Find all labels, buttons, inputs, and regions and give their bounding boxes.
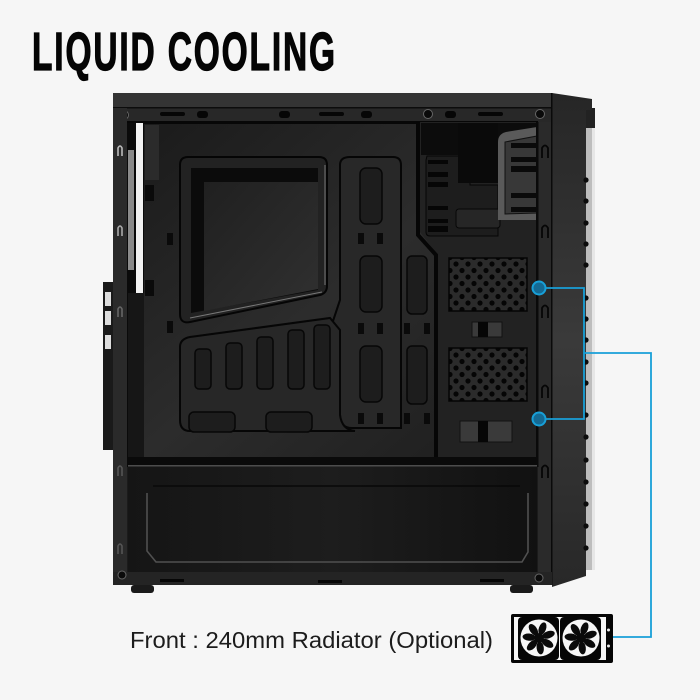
callout lines <box>546 288 651 637</box>
feet <box>131 585 533 593</box>
icon: radiator <box>511 614 613 663</box>
top cover <box>113 93 552 124</box>
callout dot upper <box>532 282 546 294</box>
drive bay area <box>418 122 538 465</box>
fan frames <box>518 617 601 660</box>
right rail <box>536 93 552 585</box>
bottom rail <box>113 571 552 585</box>
radiator label: Front : 240mm Radiator (Optional) <box>130 627 493 653</box>
front panel <box>552 93 595 587</box>
PC case <box>103 93 595 593</box>
PSU shroud <box>127 457 538 572</box>
left rail and expansion slot <box>113 108 159 585</box>
icon: fan left <box>520 620 558 656</box>
mesh vent upper <box>449 258 527 311</box>
mesh vent lower <box>449 348 527 401</box>
cable routing slots <box>189 168 427 432</box>
small clips <box>145 185 430 424</box>
rear IO bracket <box>103 282 114 450</box>
case frame <box>113 93 552 585</box>
title: LIQUID COOLING <box>32 21 337 82</box>
lower tray outline <box>180 318 355 431</box>
PSU bracket <box>498 127 537 220</box>
raised tray outline <box>330 157 401 428</box>
motherboard tray <box>127 122 538 467</box>
large CPU cutout <box>180 157 327 322</box>
icon: fan right <box>562 620 600 656</box>
callout dot lower <box>532 412 546 426</box>
